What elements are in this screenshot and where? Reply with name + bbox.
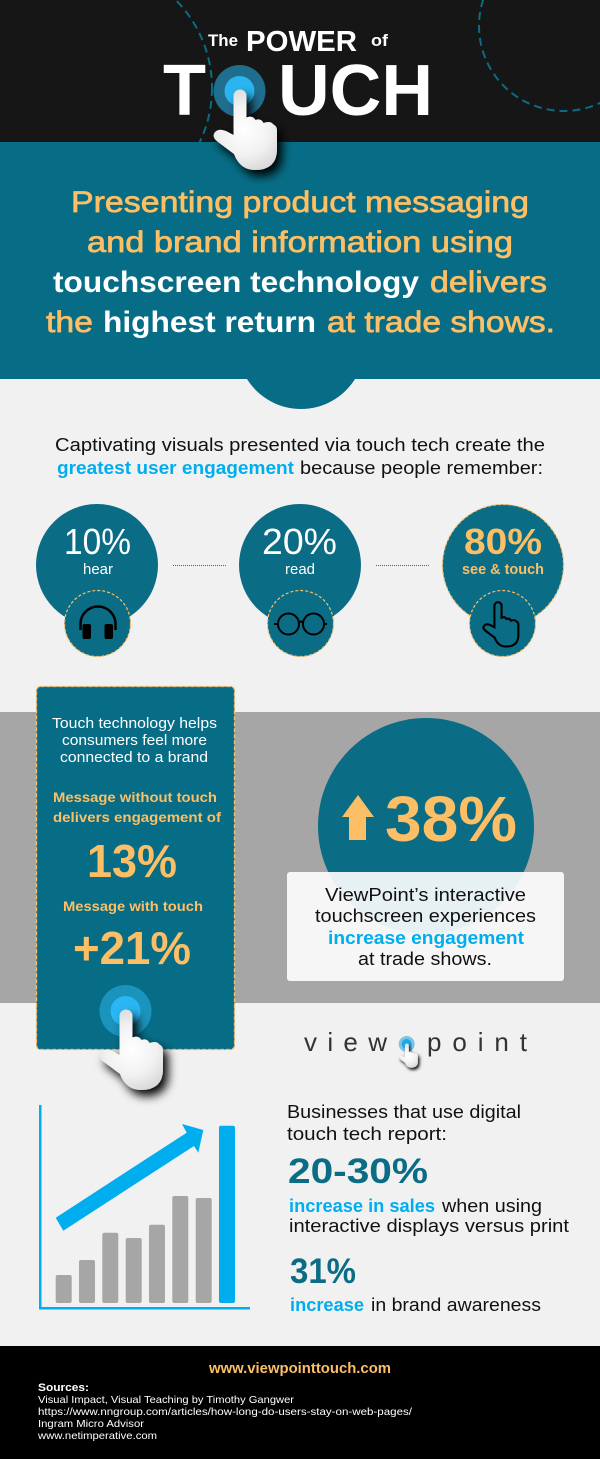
sources list: Sources: bbox=[38, 1382, 89, 1394]
message without touch: 13% bbox=[87, 835, 177, 887]
stat circle: 10% hear: hear bbox=[83, 561, 113, 578]
message without touch: delivers engagement of bbox=[53, 810, 222, 825]
sources list: Ingram Micro Advisor bbox=[38, 1418, 145, 1430]
panel: teal headline bbox=[0, 142, 600, 409]
message without touch bbox=[53, 790, 222, 887]
logo: viewpoint bbox=[304, 1027, 528, 1068]
stat circle: 80% see and touch: see & touch bbox=[462, 561, 544, 578]
headline text bbox=[46, 186, 555, 339]
icon: touch ripple and hand in title bbox=[214, 65, 277, 170]
arrow: upward trend bbox=[56, 1124, 203, 1231]
title: The Power of Touch: of bbox=[371, 31, 388, 50]
intro text: because people remember: bbox=[300, 458, 543, 478]
panel: touch technology card bbox=[36, 686, 234, 1050]
stat circle: 20% read: 20% bbox=[262, 521, 337, 562]
sources list: https://www.nngroup.com/articles/how-long-do-users-stay-on-web-pages/ bbox=[38, 1406, 412, 1418]
stat circle: 10% hear: 10% bbox=[64, 521, 131, 562]
connector dots bbox=[173, 564, 226, 566]
stat circle: 20% read bbox=[239, 504, 361, 656]
website link: www.viewpointtouch.com bbox=[208, 1360, 391, 1377]
panel: gray band bbox=[0, 712, 600, 1003]
bar chart: growth bbox=[39, 1105, 250, 1310]
card intro text: consumers feel more bbox=[62, 733, 207, 749]
card intro text bbox=[52, 716, 217, 766]
icon: pointing hand outline bbox=[483, 602, 518, 646]
headline text: touchscreen technology bbox=[53, 266, 419, 299]
message with touch bbox=[63, 899, 203, 974]
panel: title header bbox=[0, 0, 600, 142]
brand awareness text: increase bbox=[290, 1295, 364, 1315]
text block: businesses report: touch tech report: bbox=[287, 1124, 447, 1144]
headline text: delivers bbox=[430, 266, 547, 299]
headline text: and brand information using bbox=[87, 226, 513, 259]
title: The Power of Touch: POWER bbox=[246, 26, 357, 58]
logo: viewpoint: view bbox=[304, 1027, 387, 1057]
stat circle: 80% see and touch: 80% bbox=[464, 521, 542, 562]
sales text: when using bbox=[441, 1196, 542, 1216]
sources list: Visual Impact, Visual Teaching by Timothy Gangwer bbox=[38, 1394, 295, 1406]
headline text: the bbox=[46, 306, 93, 339]
stat circle: 10% hear bbox=[36, 504, 158, 656]
stat: 20-30%: 20-30% bbox=[288, 1152, 428, 1191]
brand awareness text bbox=[290, 1295, 541, 1315]
sales text: increase in sales bbox=[289, 1196, 435, 1216]
stat circle: 20% read: read bbox=[285, 561, 315, 578]
icon: up arrow bbox=[342, 795, 374, 840]
intro text bbox=[55, 435, 545, 478]
headline text: at trade shows. bbox=[327, 306, 555, 339]
icon: touch ripple and hand on card bbox=[100, 985, 163, 1090]
callout: viewpoint engagement: increase engagement bbox=[328, 928, 524, 948]
text block: businesses report bbox=[287, 1102, 569, 1315]
title: The Power of Touch: T bbox=[163, 51, 206, 131]
sources list: www.netimperative.com bbox=[37, 1430, 157, 1442]
stat: 31%: 31% bbox=[290, 1252, 356, 1291]
callout: viewpoint engagement bbox=[287, 872, 564, 981]
stat circle: 80% see and touch bbox=[442, 504, 564, 656]
message without touch: Message without touch bbox=[53, 790, 217, 805]
message with touch: +21% bbox=[73, 922, 191, 974]
card intro text: connected to a brand bbox=[60, 750, 208, 766]
headline text: Presenting product messaging bbox=[71, 186, 529, 219]
headline text: highest return bbox=[103, 306, 316, 339]
title: The Power of Touch: The bbox=[208, 31, 238, 50]
connector dots bbox=[376, 564, 429, 566]
callout: viewpoint engagement: touchscreen experiences bbox=[315, 906, 536, 926]
callout: viewpoint engagement: ViewPoint’s interactive bbox=[325, 885, 526, 905]
text block: businesses report: Businesses that use digital bbox=[287, 1102, 521, 1122]
brand awareness text: in brand awareness bbox=[371, 1295, 541, 1315]
intro text: Captivating visuals presented via touch tech create the bbox=[55, 435, 545, 455]
callout: viewpoint engagement: at trade shows. bbox=[358, 949, 492, 969]
panel: footer bbox=[0, 1346, 600, 1459]
intro text: greatest user engagement bbox=[57, 458, 294, 478]
icon: glasses bbox=[274, 614, 327, 634]
sales text bbox=[289, 1196, 569, 1236]
icon: headphones bbox=[80, 606, 116, 639]
title: The Power of Touch: UCH bbox=[278, 51, 433, 131]
title: The Power of Touch bbox=[163, 26, 433, 131]
sources list bbox=[37, 1382, 412, 1442]
message with touch: Message with touch bbox=[63, 899, 203, 914]
logo: viewpoint: point bbox=[427, 1027, 528, 1057]
stat circle: 38 percent bbox=[318, 718, 534, 934]
sales text: interactive displays versus print bbox=[289, 1216, 569, 1236]
card intro text: Touch technology helps bbox=[52, 716, 217, 732]
stat circle: 38 percent: 38% bbox=[385, 783, 517, 855]
